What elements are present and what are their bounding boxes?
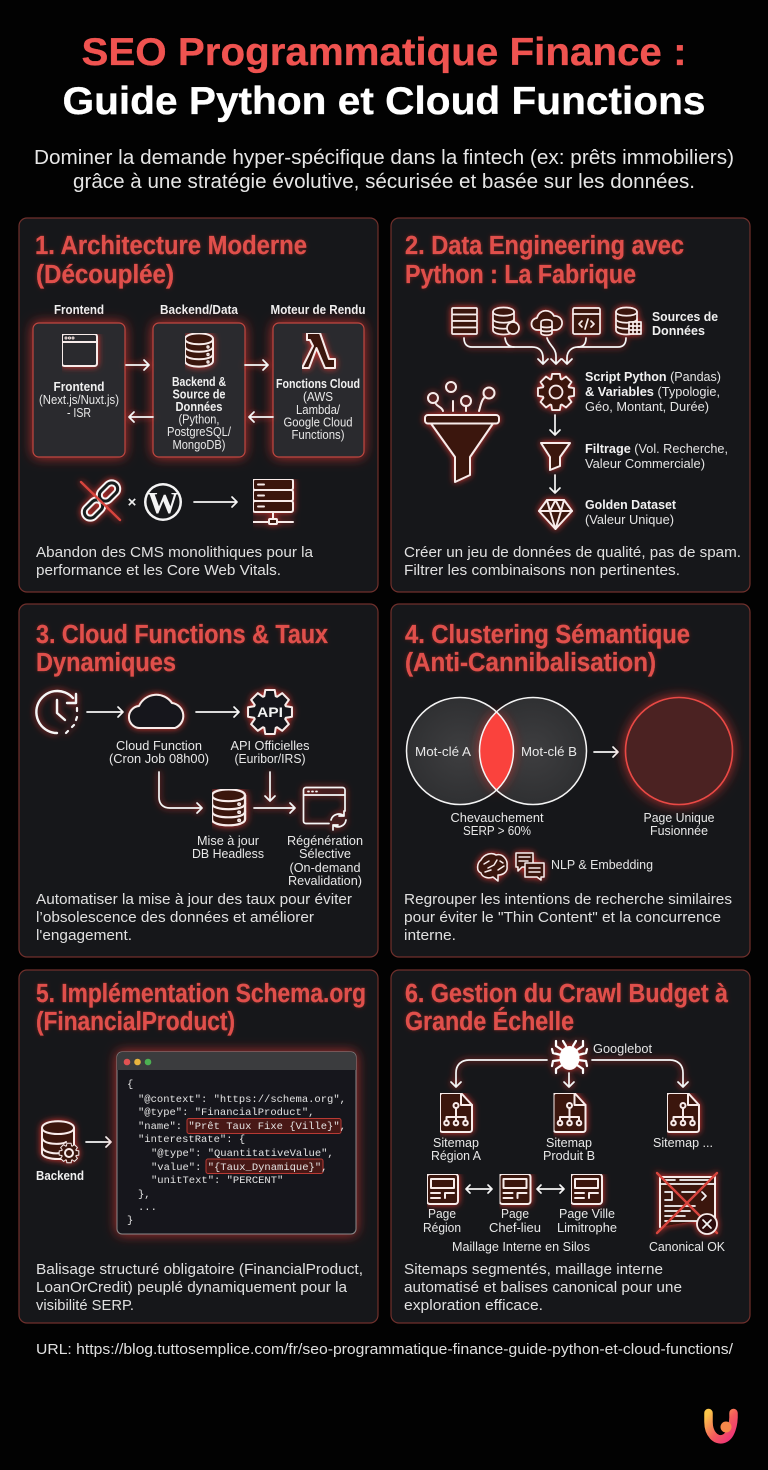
- column labels: Moteur de Rendu: [270, 303, 366, 317]
- label: API: [230, 739, 310, 766]
- label: unique page: Page Unique: [644, 811, 715, 825]
- code window: "name": "Prêt Taux Fixe {Ville}",: [138, 1121, 346, 1133]
- label: regeneration: Revalidation): [288, 874, 362, 888]
- label: cloud function: [109, 739, 209, 766]
- arrow: clock to cloud: [87, 707, 123, 717]
- icons: data sources: [452, 308, 641, 335]
- icon: broken link crossed out: [81, 480, 120, 521]
- filter text: Filtrage (Vol. Recherche,: [585, 442, 728, 456]
- column labels: [54, 303, 366, 317]
- venn diagram: Mot-clé A: [415, 745, 472, 759]
- code window: "@context": "https://schema.org",: [138, 1094, 346, 1106]
- arrows between boxes: [126, 360, 273, 422]
- double arrows: [466, 1185, 564, 1193]
- icon: sitemap B: [554, 1093, 586, 1132]
- label: page region: Région: [423, 1221, 461, 1235]
- label: API: (Euribor/IRS): [234, 752, 306, 766]
- description: panel 4: [404, 891, 732, 944]
- sources label: Sources de: [652, 310, 718, 324]
- arrow: script to filter: [550, 415, 560, 435]
- label: googlebot: Googlebot: [593, 1042, 653, 1056]
- icon: page region: [427, 1174, 458, 1204]
- heading: panel 1: 1. Architecture Moderne: [35, 232, 307, 260]
- script text: Script Python (Pandas): [585, 370, 721, 384]
- heading: panel 5: (FinancialProduct): [36, 1008, 235, 1036]
- code window: {: [127, 1079, 133, 1091]
- heading: panel 3: Dynamiques: [36, 649, 176, 677]
- description: panel 1: [36, 544, 314, 579]
- code window: ...: [138, 1202, 157, 1214]
- venn diagram: Mot-clé B: [521, 745, 577, 759]
- code window: [117, 1052, 356, 1234]
- icon: API gear: API: [257, 704, 283, 720]
- script text: & Variables (Typologie,: [585, 385, 720, 399]
- title: Guide Python et Cloud Functions: [62, 80, 706, 123]
- label: page region: [423, 1207, 461, 1235]
- label: regeneration: [287, 834, 363, 888]
- heading: panel 6: Grande Échelle: [405, 1007, 574, 1036]
- code window: "@type": "QuantitativeValue",: [151, 1148, 334, 1160]
- icon: sitemap A: [440, 1093, 472, 1132]
- frontend text: - ISR: [67, 406, 91, 420]
- backend text: PostgreSQL/: [167, 425, 231, 439]
- label: overlap: SERP > 60%: [463, 824, 531, 838]
- label: regeneration: Régénération: [287, 834, 363, 848]
- panel: 6 crawl budget: [391, 970, 750, 1323]
- label: page ville: Limitrophe: [557, 1221, 617, 1235]
- icon: wordpress logo: W: [148, 485, 178, 520]
- filter text: Valeur Commerciale): [585, 457, 705, 471]
- box: cloud functions: [273, 323, 364, 457]
- sources label: Données: [652, 324, 705, 338]
- label: cloud function: Cloud Function: [116, 739, 202, 753]
- label: sitemap B: Produit B: [543, 1149, 595, 1163]
- backend text: [167, 375, 231, 452]
- heading: panel 4: (Anti-Cannibalisation): [405, 649, 656, 677]
- icon: spider: [552, 1041, 587, 1073]
- heading: panel 6: [405, 980, 729, 1036]
- icon: API gear: [248, 690, 292, 734]
- description: panel 2: Filtrer les combinaisons non pertinentes.: [404, 562, 680, 579]
- title: SEO Programmatique Finance :: [82, 31, 686, 74]
- label: unique page: Fusionnée: [650, 824, 708, 838]
- label: db update: DB Headless: [192, 847, 264, 861]
- backend text: Données: [176, 400, 223, 414]
- description: panel 2: Créer un jeu de données de qualité, pas de spam.: [404, 544, 741, 561]
- icon: window refresh: [304, 788, 346, 830]
- icon: database with gear: [42, 1121, 79, 1163]
- heading: panel 6: 6. Gestion du Crawl Budget à: [405, 980, 729, 1008]
- label: regeneration: Sélective: [299, 847, 351, 861]
- frontend text: (Next.js/Nuxt.js): [39, 393, 119, 407]
- frontend text: [39, 380, 119, 420]
- heading: panel 2: 2. Data Engineering avec: [405, 232, 684, 260]
- label: page chef-lieu: Chef-lieu: [489, 1221, 541, 1235]
- icon: small funnel: [541, 443, 570, 470]
- label: page chef-lieu: Page: [501, 1207, 529, 1221]
- icon: page ville: [571, 1174, 602, 1204]
- arrow: backend to code: [86, 1137, 111, 1147]
- description: panel 3: l’obsolescence des données et améliorer: [36, 909, 314, 926]
- heading: panel 1: (Découplée): [36, 261, 174, 289]
- description: panel 3: Automatiser la mise à jour des taux pour éviter: [36, 891, 352, 908]
- frontend text: Frontend: [54, 380, 104, 394]
- description: panel 4: pour éviter le "Thin Content" et la concurrence: [404, 909, 721, 926]
- heading: panel 5: 5. Implémentation Schema.org: [36, 980, 366, 1008]
- heading: panel 2: Python : La Fabrique: [405, 261, 636, 289]
- column labels: Backend/Data: [160, 303, 239, 317]
- backend text: Source de: [172, 388, 226, 402]
- label: backend: Backend: [36, 1169, 84, 1183]
- code window: "value": "{Taux_Dynamique}",: [151, 1162, 327, 1174]
- label: NLP: NLP & Embedding: [551, 858, 653, 872]
- panel: 2 data engineering: [391, 218, 750, 592]
- description: panel 4: interne.: [404, 927, 456, 944]
- description: panel 2: [404, 544, 741, 579]
- icon: diamond: [539, 500, 572, 529]
- filter text: [585, 442, 728, 471]
- label: overlap: [450, 811, 544, 838]
- dataset text: Golden Dataset: [585, 498, 677, 512]
- cloud functions text: Lambda/: [296, 403, 340, 417]
- heading: panel 4: [405, 621, 690, 677]
- description: panel 1: Abandon des CMS monolithiques pour la: [36, 544, 314, 561]
- description: panel 6: Sitemaps segmentés, maillage interne: [404, 1261, 663, 1278]
- icon: lambda: [302, 333, 335, 368]
- source URL: URL: https://blog.tuttosemplice.com/fr/seo-programmatique-finance-guide-python-et-cloud-functions/: [36, 1341, 734, 1358]
- box: backend: [153, 323, 245, 457]
- code window: "@type": "FinancialProduct",: [138, 1107, 314, 1119]
- label: sitemap B: [543, 1136, 595, 1163]
- icon: big funnel: [425, 382, 499, 482]
- description: panel 6: exploration efficace.: [404, 1297, 543, 1314]
- description: panel 5: LoanOrCredit) peuplé dynamiquement pour la: [36, 1279, 348, 1296]
- subtitle: Dominer la demande hyper-spécifique dans la fintech (ex: prêts immobiliers): [34, 147, 734, 169]
- heading: panel 1: [35, 232, 307, 289]
- icon: browser window: [62, 334, 97, 366]
- sources label: [652, 310, 718, 338]
- label: canonical: Canonical OK: [649, 1240, 726, 1254]
- description: panel 1: performance et les Core Web Vitals.: [36, 562, 281, 579]
- label: API: API Officielles: [230, 739, 310, 753]
- label: unique page: [644, 811, 715, 838]
- code window: },: [138, 1189, 151, 1201]
- heading: panel 2: [405, 232, 684, 289]
- panel: 3 cloud functions: [19, 604, 378, 957]
- label: page region: Page: [428, 1207, 456, 1221]
- cloud functions text: Google Cloud: [284, 416, 353, 430]
- arrow to server: [194, 497, 237, 507]
- code window: "interestRate": {: [138, 1134, 245, 1146]
- backend text: MongoDB): [172, 438, 226, 452]
- code window: "unitText": "PERCENT": [151, 1175, 283, 1187]
- cloud functions text: Fonctions Cloud: [276, 377, 360, 391]
- subtitle: [34, 147, 734, 193]
- description: panel 3: l'engagement.: [36, 927, 132, 944]
- backend text: (Python,: [178, 412, 220, 426]
- subtitle: grâce à une stratégie évolutive, sécurisée et basée sur les données.: [73, 171, 695, 193]
- icon: cloud: [129, 695, 183, 728]
- label: db update: [192, 834, 264, 861]
- description: panel 5: Balisage structuré obligatoire (FinancialProduct,: [36, 1261, 363, 1278]
- code window: }: [127, 1215, 133, 1227]
- dataset text: (Valeur Unique): [585, 513, 674, 527]
- icon: page chef-lieu: [500, 1174, 530, 1204]
- description: panel 5: visibilité SERP.: [36, 1297, 134, 1314]
- heading: panel 3: 3. Cloud Functions & Taux: [36, 621, 328, 649]
- label: sitemap A: Région A: [431, 1149, 482, 1163]
- description: panel 4: Regrouper les intentions de recherche similaires: [404, 891, 732, 908]
- arrow: merge: [594, 747, 618, 757]
- heading: panel 3: [36, 621, 328, 677]
- label: page ville: [557, 1207, 617, 1235]
- cloud functions text: [276, 377, 360, 442]
- icon: brain: [478, 854, 507, 881]
- icon: gear: [538, 374, 574, 410]
- backend text: Backend &: [172, 375, 226, 389]
- connectors: sources to script: [464, 338, 626, 364]
- merged page circle: [626, 698, 732, 804]
- label: overlap: Chevauchement: [450, 811, 544, 825]
- label: sitemap B: Sitemap: [546, 1136, 592, 1150]
- label: sitemap A: Sitemap: [433, 1136, 479, 1150]
- column labels: Frontend: [54, 303, 104, 317]
- title: [62, 31, 706, 123]
- panel: 4 clustering: [391, 604, 750, 957]
- script text: Géo, Montant, Durée): [585, 400, 709, 414]
- arrows: bot to sitemaps: [451, 1060, 688, 1087]
- icon: database: [212, 789, 245, 825]
- label: silos: Maillage Interne en Silos: [452, 1240, 590, 1254]
- box: frontend: [33, 323, 125, 457]
- icon: database: [185, 333, 213, 367]
- heading: panel 4: 4. Clustering Sémantique: [405, 621, 690, 649]
- arrow: cloud to api: [196, 707, 239, 717]
- description: panel 5: [36, 1261, 363, 1314]
- label: sitemap A: [431, 1136, 482, 1163]
- venn diagram: [406, 698, 586, 804]
- label: regeneration: (On-demand: [290, 861, 361, 875]
- description: panel 6: [404, 1261, 682, 1314]
- icon: server: [253, 479, 293, 524]
- icon: chat bubbles: [516, 853, 544, 880]
- dataset text: [585, 498, 677, 527]
- heading: panel 5: [36, 980, 366, 1036]
- panel: 5 schema.org: [19, 970, 378, 1323]
- icon: canonical crossed page: [657, 1173, 717, 1234]
- label: cloud function: (Cron Job 08h00): [109, 752, 209, 766]
- icon: clock: [36, 691, 77, 733]
- label: page ville: Page Ville: [559, 1207, 615, 1221]
- label: sitemap other: Sitemap ...: [653, 1136, 713, 1150]
- label: db update: Mise à jour: [197, 834, 259, 848]
- arrow: filter to dataset: [550, 475, 560, 493]
- cloud functions text: (AWS: [303, 390, 333, 404]
- multiply sign: ×: [128, 494, 137, 511]
- panel: 1 architecture moderne: [19, 218, 378, 592]
- description: panel 3: [36, 891, 352, 944]
- icon: sitemap other: [667, 1093, 699, 1132]
- logo: [708, 1413, 734, 1439]
- arrows: flow to database: [159, 772, 295, 813]
- label: page chef-lieu: [489, 1207, 541, 1235]
- cloud functions text: Functions): [292, 428, 344, 442]
- script text: [585, 370, 721, 414]
- description: panel 6: automatisé et balises canonical pour une: [404, 1279, 682, 1296]
